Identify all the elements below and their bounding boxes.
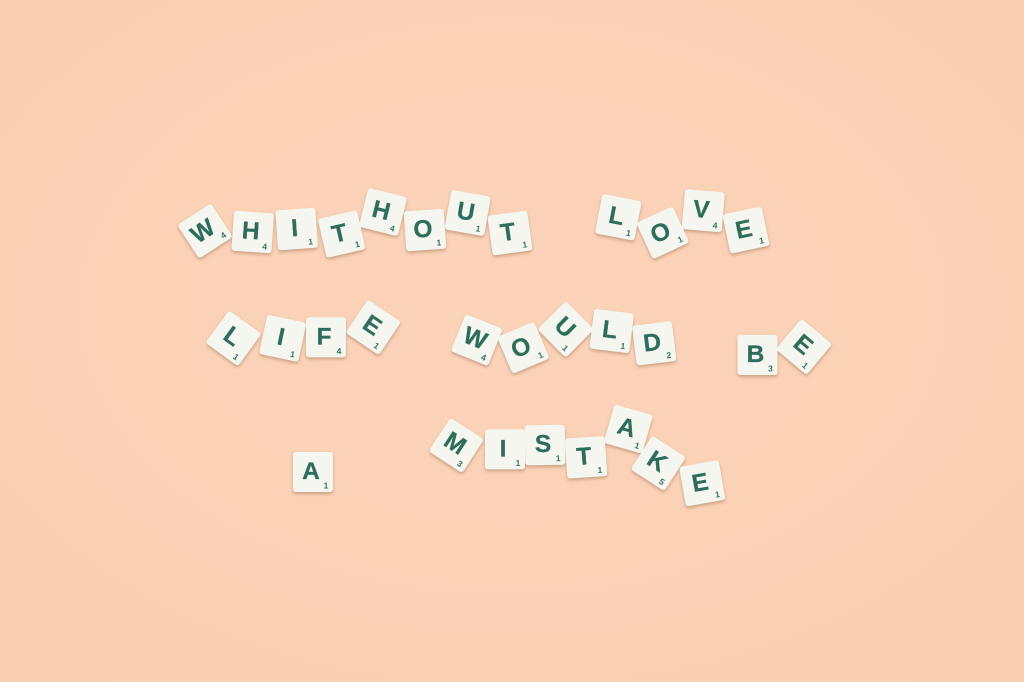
tile: I: 1 bbox=[308, 236, 314, 247]
tile: B bbox=[738, 335, 778, 375]
tile: L bbox=[595, 194, 642, 241]
tile: W bbox=[451, 314, 503, 366]
tile: E: E bbox=[733, 215, 755, 245]
tile: T bbox=[487, 210, 533, 256]
word: WOULD bbox=[451, 301, 677, 374]
word: BE bbox=[738, 319, 832, 375]
tile: K bbox=[631, 436, 686, 491]
tile: O bbox=[404, 209, 446, 251]
tile: H: H bbox=[241, 217, 261, 245]
tile: E: E bbox=[690, 468, 711, 498]
tile: E: 1 bbox=[714, 489, 721, 500]
tile: S: 1 bbox=[556, 453, 561, 463]
tile: O: O bbox=[507, 332, 535, 364]
tile: L bbox=[206, 310, 261, 366]
tile: T bbox=[318, 210, 366, 258]
tile: L bbox=[589, 309, 634, 353]
tile: E bbox=[776, 319, 832, 375]
word: WHITHOUT bbox=[177, 188, 533, 259]
tile: O bbox=[497, 321, 550, 374]
tile: T: T bbox=[576, 443, 592, 471]
tile: L: L bbox=[607, 202, 626, 231]
tile: U: 1 bbox=[560, 343, 571, 353]
tile: F bbox=[306, 317, 346, 357]
tile: U bbox=[537, 301, 594, 358]
word: LIFE bbox=[206, 300, 401, 366]
tile: T: 1 bbox=[354, 239, 361, 250]
tile: E bbox=[346, 300, 401, 355]
tile: D: 2 bbox=[666, 350, 672, 360]
tile: D: D bbox=[642, 329, 663, 358]
tile: D bbox=[632, 321, 677, 366]
tile: E: E bbox=[358, 310, 386, 342]
tile: T: T bbox=[499, 218, 517, 247]
tile: T: T bbox=[329, 219, 350, 249]
tile: I: I bbox=[290, 215, 299, 242]
tile: S bbox=[525, 425, 565, 465]
tile: O: O bbox=[646, 217, 675, 249]
tile: H bbox=[359, 188, 407, 236]
tile: V bbox=[682, 189, 725, 232]
tile: T bbox=[565, 436, 607, 479]
tile: B: 3 bbox=[768, 364, 773, 374]
word: MISTAKE bbox=[429, 404, 725, 506]
tile: L: 1 bbox=[231, 351, 241, 362]
tile: B: B bbox=[747, 341, 764, 368]
tile: I: 1 bbox=[289, 349, 296, 360]
tile: E bbox=[722, 206, 770, 254]
tile: E bbox=[679, 460, 725, 506]
tile: A: A bbox=[302, 458, 320, 485]
tile: H bbox=[231, 211, 274, 253]
tile: H: 4 bbox=[262, 241, 268, 252]
tile: O: O bbox=[413, 216, 433, 244]
tile: I: I bbox=[275, 323, 287, 351]
tile: I: I bbox=[500, 435, 506, 462]
tile: A bbox=[604, 404, 653, 454]
tile: E: 1 bbox=[758, 235, 765, 246]
tile: O: 1 bbox=[676, 234, 685, 245]
tile: W: 4 bbox=[480, 352, 488, 363]
tile: U bbox=[445, 190, 491, 236]
tile: I bbox=[485, 429, 525, 469]
tile: A: 1 bbox=[633, 440, 641, 451]
tile: M: M bbox=[439, 427, 471, 461]
tile: M: 3 bbox=[455, 458, 465, 469]
tile: O: 1 bbox=[536, 349, 545, 361]
tile: U: 1 bbox=[475, 223, 482, 234]
tile: I bbox=[275, 208, 318, 250]
tile: W: 4 bbox=[219, 230, 228, 241]
tile: F: F bbox=[317, 323, 332, 350]
tile: A: 1 bbox=[324, 480, 329, 490]
tile: K: K bbox=[642, 446, 672, 478]
tile: M bbox=[429, 418, 484, 473]
tile: H: 4 bbox=[389, 223, 396, 234]
tile: W: W bbox=[186, 214, 221, 249]
word: LOVE bbox=[595, 189, 770, 259]
tile: F: 4 bbox=[337, 346, 342, 356]
tile: U: U bbox=[549, 312, 580, 343]
tile: E: 1 bbox=[800, 360, 811, 371]
tile: O: 1 bbox=[436, 237, 442, 248]
tile: E: E bbox=[788, 329, 818, 361]
tile: O bbox=[636, 206, 689, 259]
tile: K: 5 bbox=[657, 476, 667, 487]
word: A bbox=[293, 452, 333, 492]
tile: W: W bbox=[459, 322, 492, 356]
tile: I: 1 bbox=[516, 458, 521, 468]
tile: U: U bbox=[455, 197, 477, 227]
tile: L: 1 bbox=[620, 341, 626, 351]
tile: V: 4 bbox=[712, 220, 718, 230]
tile: T: 1 bbox=[597, 465, 603, 475]
tile: T: 1 bbox=[522, 239, 528, 250]
tile: S: S bbox=[535, 431, 551, 458]
tile: A bbox=[293, 452, 333, 492]
tile: I bbox=[259, 315, 306, 362]
tile: E: 1 bbox=[372, 340, 382, 351]
tile: L: L bbox=[601, 316, 619, 345]
tile: W bbox=[177, 203, 233, 259]
tile: L: L bbox=[218, 321, 246, 352]
tile: H: H bbox=[369, 196, 393, 226]
tile: V: V bbox=[692, 196, 711, 224]
tile: L: 1 bbox=[625, 228, 632, 238]
tile: A: A bbox=[614, 413, 639, 443]
